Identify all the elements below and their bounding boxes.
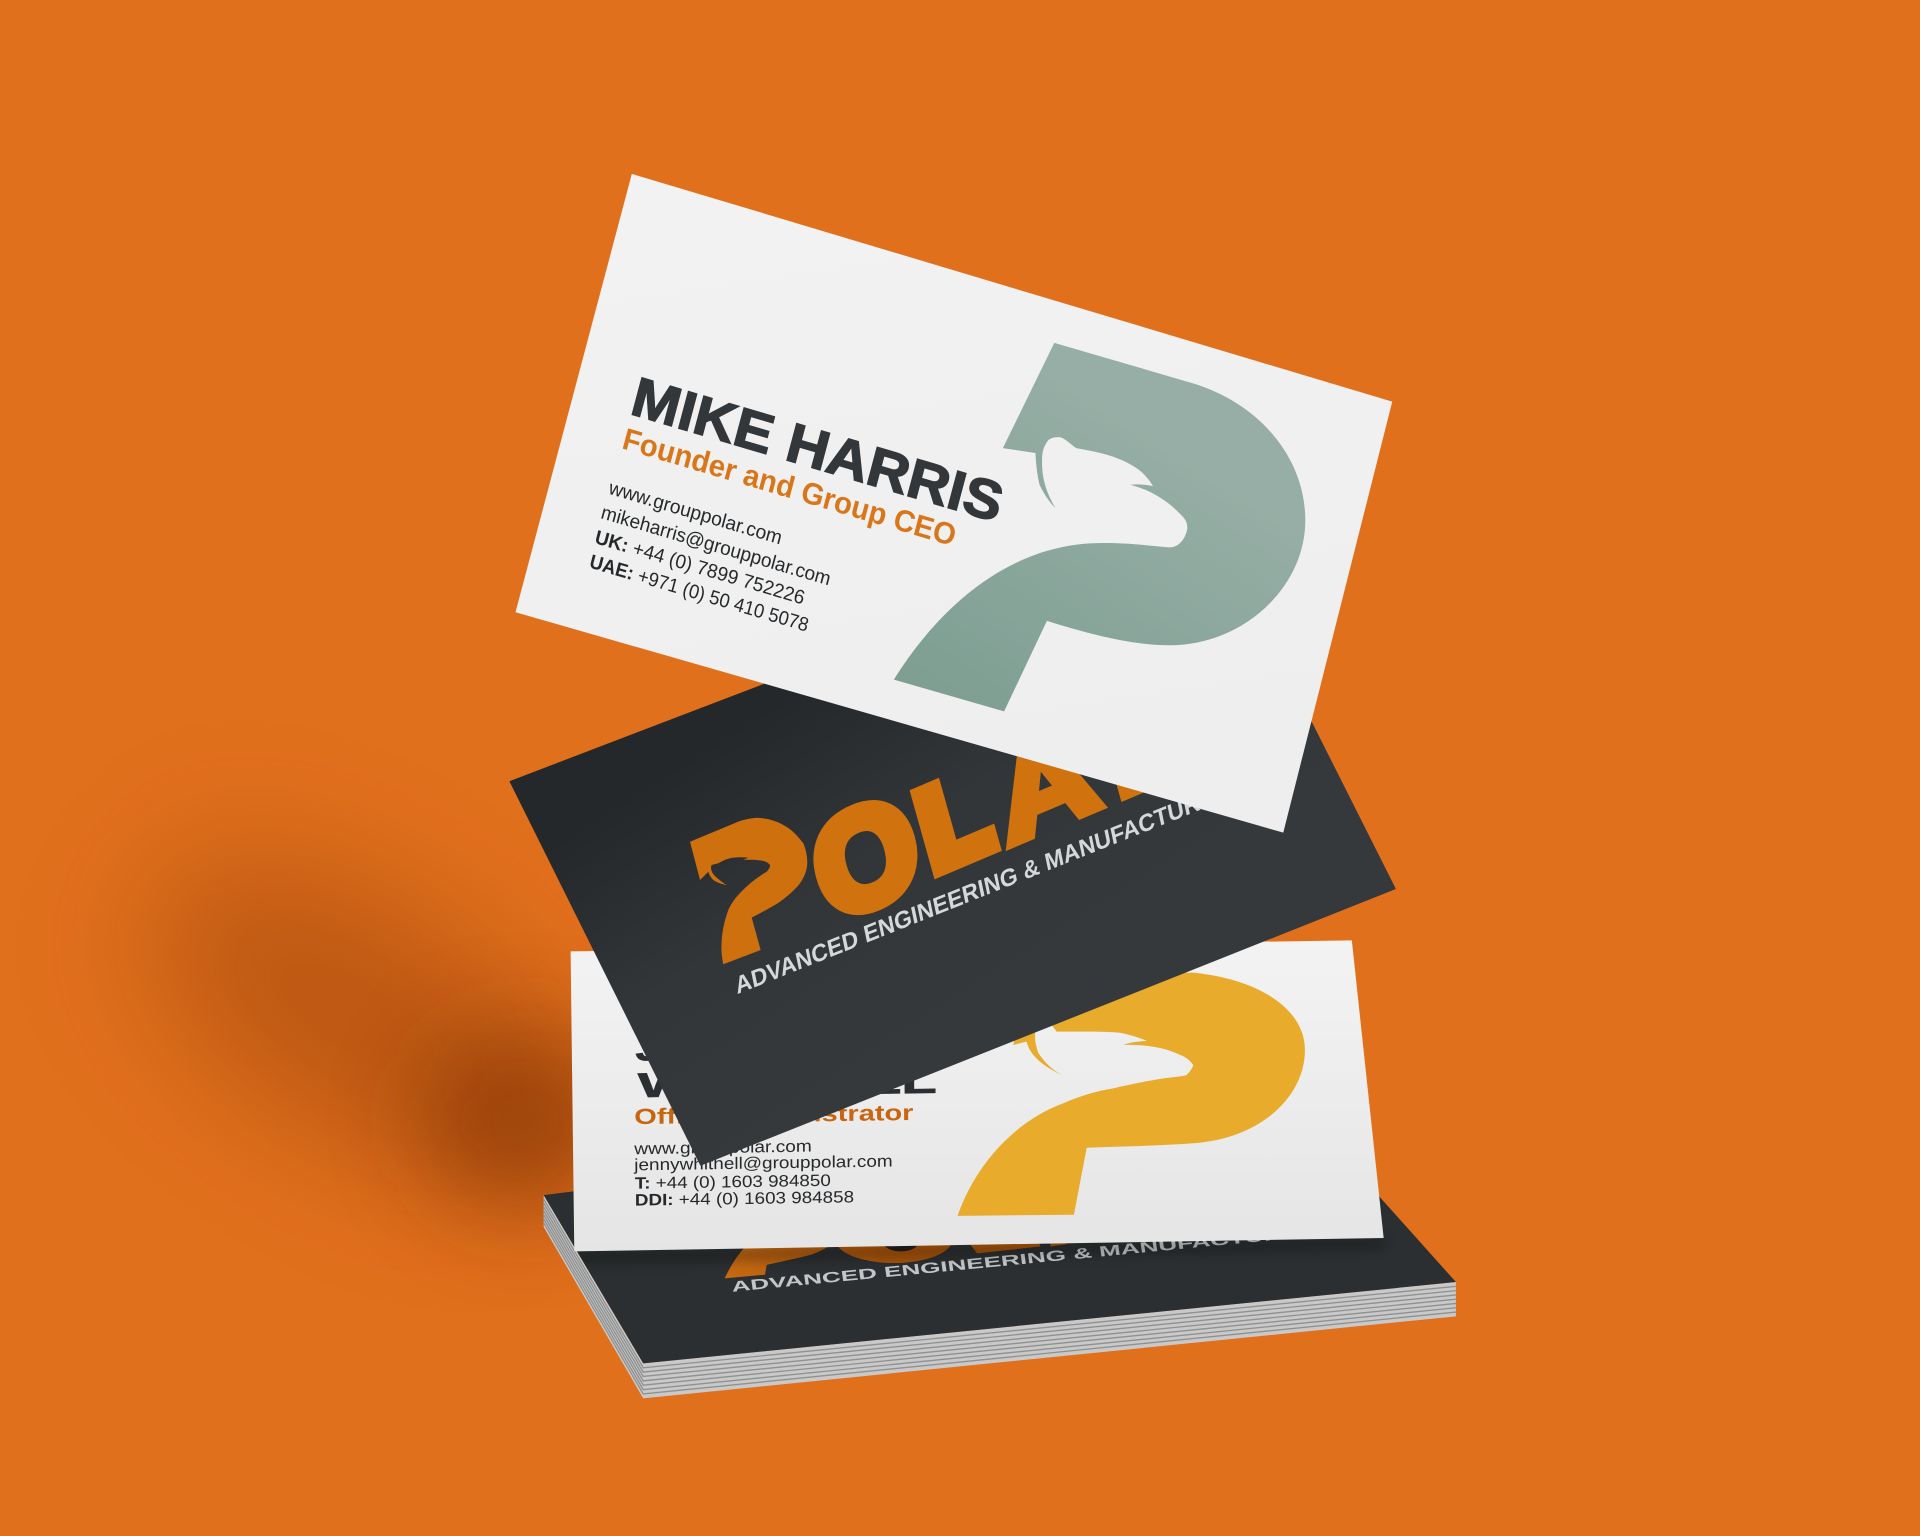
card face xyxy=(509,514,1396,1166)
contact details: www.grouppolar.com xyxy=(605,477,785,549)
contact details: jennywhithell@grouppolar.com xyxy=(633,1151,893,1174)
job title: Founder and Group CEO xyxy=(619,422,960,553)
job title: Office Administrator xyxy=(634,1100,914,1129)
name: MIKE HARRIS xyxy=(626,365,1010,534)
logo wordmark: R xyxy=(1087,655,1219,825)
stack logo: bottom of POLAR xyxy=(725,1215,1067,1278)
name: WHITHELL xyxy=(638,1063,937,1105)
name xyxy=(635,1028,937,1105)
contact details: UAE: +971 (0) 50 410 5078 xyxy=(587,551,811,637)
card: Mike Harris, white with teal P xyxy=(516,174,1392,833)
shadow of card on stack xyxy=(574,1238,1384,1264)
name: JENNY xyxy=(635,1028,783,1068)
contact details xyxy=(587,477,833,637)
contact details: UK: +44 (0) 7899 752226 xyxy=(593,526,807,609)
contact details: T: +44 (0) 1603 984850 xyxy=(635,1171,831,1193)
card face xyxy=(571,940,1384,1251)
contact details xyxy=(633,1137,893,1210)
card stack at the bottom xyxy=(544,1188,1456,1398)
stack logo: O counter xyxy=(884,1234,918,1251)
contact details: www.grouppolar.com xyxy=(633,1137,812,1158)
stack page edges xyxy=(544,1195,1456,1398)
logo wordmark: O xyxy=(797,764,934,951)
stack top surface xyxy=(544,1188,1456,1363)
card: dark with POLAR logo xyxy=(509,514,1396,1166)
logo wordmark: L xyxy=(906,748,1002,895)
contact details: DDI: +44 (0) 1603 984858 xyxy=(635,1187,854,1210)
card: Jenny, white with yellow P xyxy=(571,940,1384,1251)
contact details: mikeharris@grouppolar.com xyxy=(599,502,833,590)
cast shadow on background xyxy=(96,794,631,1238)
card face xyxy=(516,174,1392,833)
logo wordmark xyxy=(797,655,1219,951)
logo wordmark: A xyxy=(979,701,1111,871)
logo: orange P with bear xyxy=(690,818,807,964)
stack tagline: ADVANCED ENGINEERING & MANUFACTURING xyxy=(730,1222,1330,1295)
logo: yellow P with bear xyxy=(958,973,1305,1216)
logo: teal P with bear xyxy=(894,343,1305,711)
tagline: ADVANCED ENGINEERING & MANUFACTURING xyxy=(733,774,1241,1000)
